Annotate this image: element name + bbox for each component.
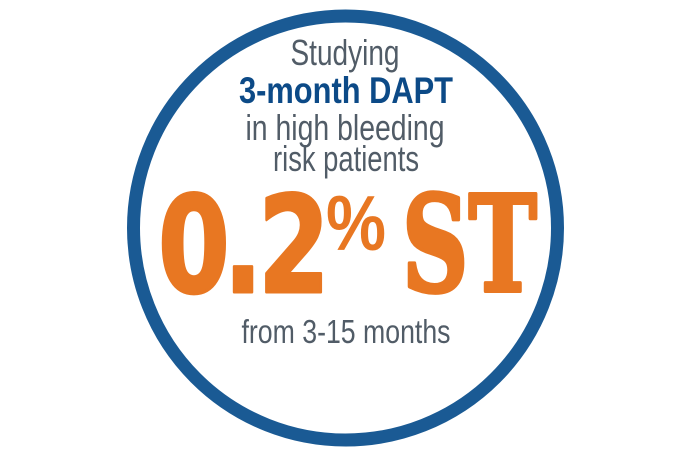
text: in high bleeding: in high bleeding: [246, 107, 444, 148]
text: risk patients: risk patients: [273, 138, 419, 179]
number: 0.2: 0.2: [158, 169, 330, 324]
text: Studying: Studying: [290, 32, 400, 73]
heading: study description: [239, 32, 453, 179]
text: from 3-15 months: from 3-15 months: [242, 313, 450, 350]
percent sign: %: [326, 179, 386, 267]
letters: ST: ST: [402, 167, 537, 323]
main statistic: 0.2% ST: [158, 167, 537, 324]
text: 3-month DAPT: 3-month DAPT: [239, 70, 453, 111]
circle ring: [134, 16, 558, 440]
